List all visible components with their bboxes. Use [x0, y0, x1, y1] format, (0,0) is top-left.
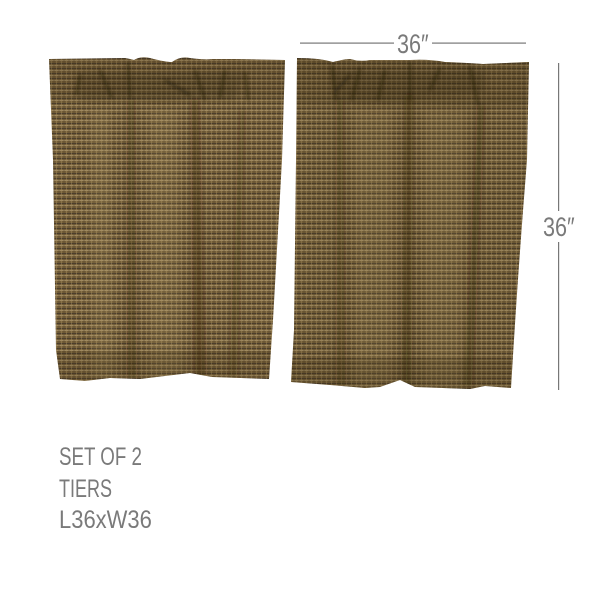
right curtain wrinkles — [332, 62, 478, 105]
left curtain panel — [49, 57, 285, 381]
set count: SET OF 2 — [59, 442, 142, 471]
right curtain panel — [285, 50, 535, 395]
right curtain hem band — [291, 358, 513, 389]
left curtain hem band — [56, 351, 271, 381]
left curtain folds — [90, 100, 245, 378]
right curtain header band — [296, 58, 529, 106]
dimensions: L36xW36 — [59, 506, 152, 533]
product description text — [59, 442, 152, 533]
left curtain gathers — [77, 72, 245, 100]
product type: TIERS — [59, 474, 112, 503]
left curtain wrinkles — [76, 62, 248, 100]
right curtain folds — [337, 95, 484, 386]
infographic canvas — [49, 34, 574, 528]
height dimension: line and label: 36″ — [543, 213, 575, 243]
left curtain header band — [49, 57, 285, 101]
right curtain gathers — [330, 70, 485, 100]
width dimension: line and label: 36″ — [397, 30, 429, 60]
